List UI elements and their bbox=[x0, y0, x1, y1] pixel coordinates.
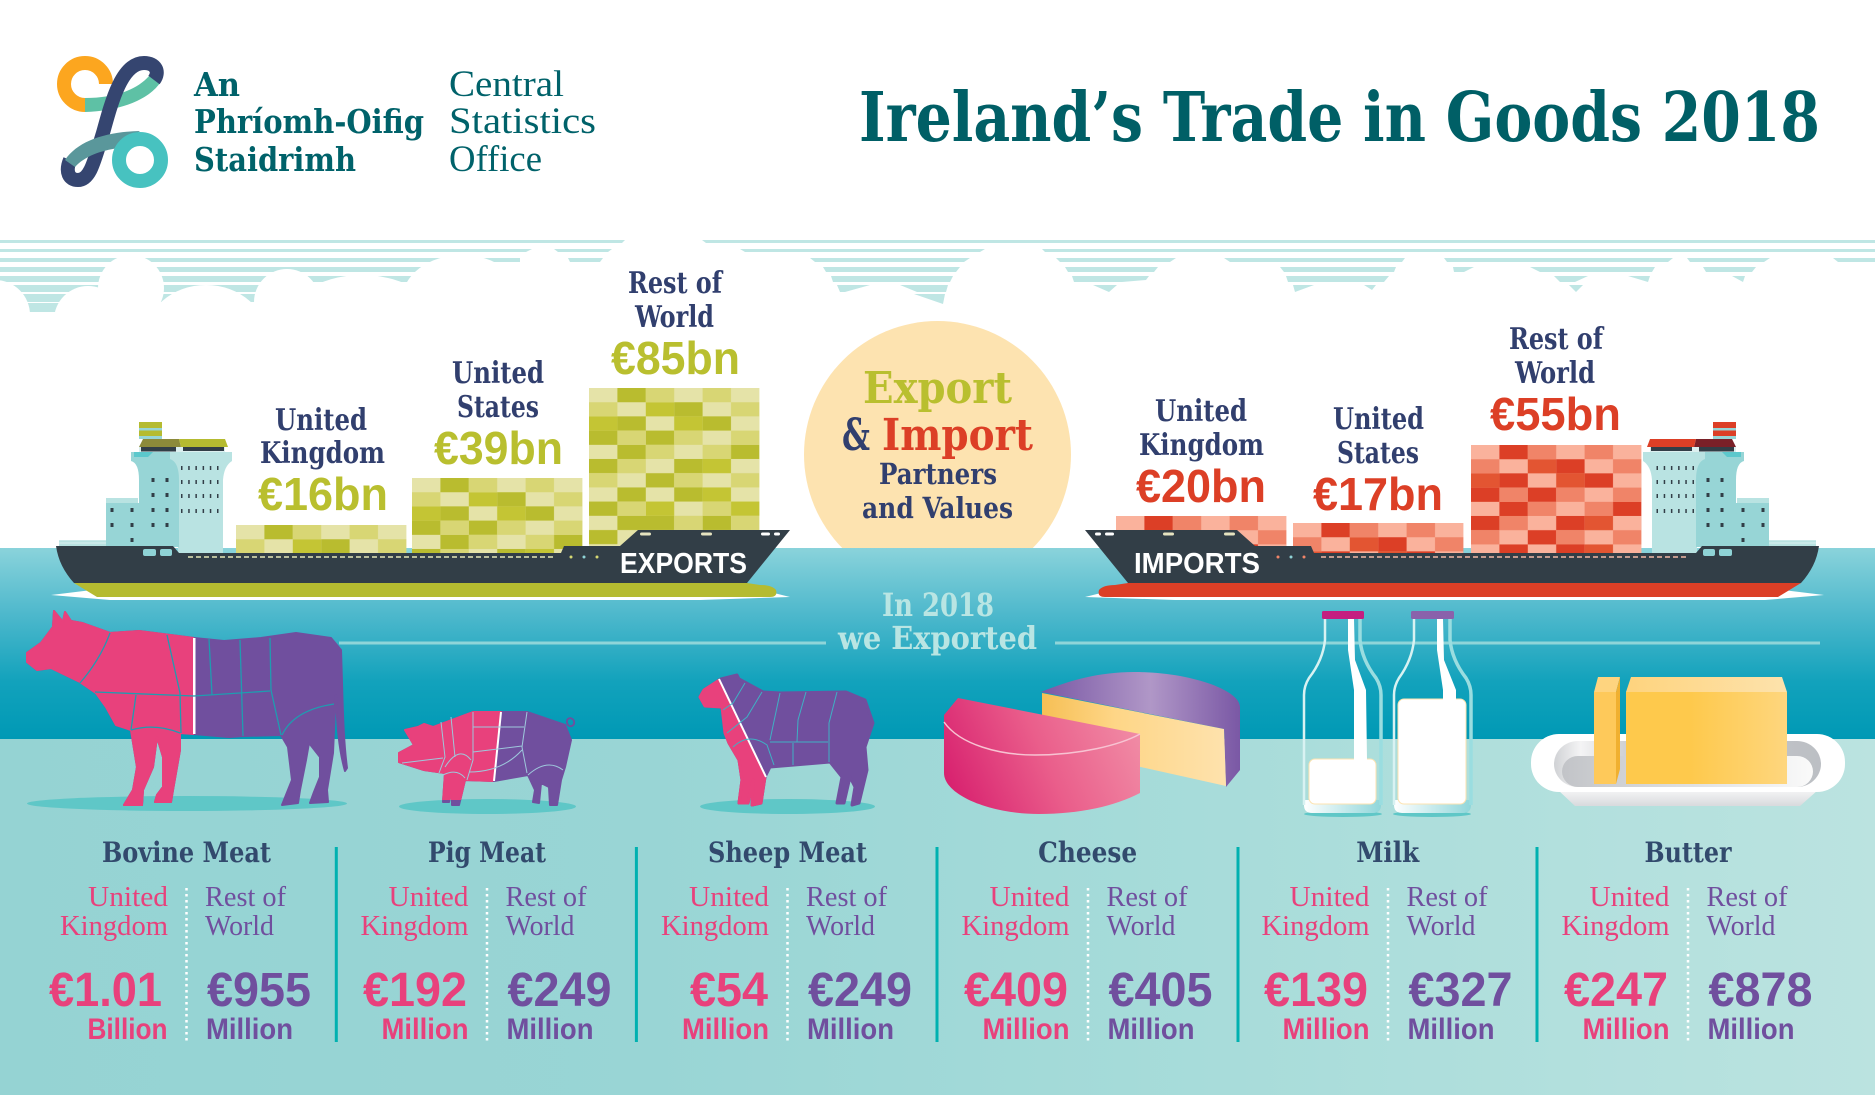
panel: Butter: Butter bbox=[1644, 836, 1732, 869]
export label: United Kingdom €16bn: €16bn bbox=[258, 468, 388, 520]
panel: Bovine Meat: Kingdom bbox=[60, 910, 168, 942]
icon: butter on dish bbox=[1531, 677, 1845, 806]
panel: Cheese: Kingdom bbox=[962, 910, 1070, 942]
export hull bottom bbox=[74, 583, 776, 597]
EXPORTS label: EXPORTS bbox=[620, 548, 747, 580]
heading: Export & Import Partners and Values: & bbox=[842, 410, 870, 461]
panel: Sheep Meat: Kingdom bbox=[661, 910, 769, 942]
panel: Pig Meat: Kingdom bbox=[360, 910, 469, 942]
export label: Rest of World €85bn: €85bn bbox=[611, 332, 740, 384]
panel: Butter: Million bbox=[1582, 1013, 1670, 1046]
heading: Export & Import Partners and Values: Import bbox=[882, 410, 1034, 461]
panel: Butter: World bbox=[1706, 910, 1776, 942]
import containers: United States bbox=[1293, 523, 1463, 555]
sky stripes and clouds bbox=[0, 240, 1875, 395]
export label: United Kingdom €16bn bbox=[258, 403, 388, 520]
heading: Export & Import Partners and Values: Partners bbox=[879, 457, 997, 491]
panel: Milk bbox=[1262, 836, 1512, 1046]
panel: Sheep Meat: World bbox=[806, 910, 875, 942]
section rule left bbox=[339, 642, 826, 644]
panel: Butter: €878 bbox=[1708, 964, 1812, 1017]
panel: Pig Meat: €192 bbox=[363, 964, 467, 1017]
panel: Bovine Meat: Million bbox=[206, 1013, 293, 1046]
import funnel bbox=[1647, 422, 1736, 447]
import label: United Kingdom €20bn: Kingdom bbox=[1139, 428, 1264, 463]
import ship bbox=[1085, 422, 1824, 600]
import label: Rest of World €55bn: World bbox=[1514, 356, 1595, 391]
heading: In 2018 we Exported: we Exported bbox=[837, 619, 1037, 657]
panel: Pig Meat: Million bbox=[382, 1013, 468, 1046]
panel: Sheep Meat: Million bbox=[807, 1013, 894, 1046]
panel: Sheep Meat: Rest of bbox=[806, 881, 887, 913]
panel: Sheep Meat: €54 bbox=[690, 964, 768, 1017]
export label: United Kingdom €16bn: Kingdom bbox=[260, 436, 385, 471]
IMPORTS label: IMPORTS bbox=[1134, 548, 1260, 580]
panel: Bovine Meat: Billion bbox=[88, 1013, 168, 1046]
panel: Cheese: Rest of bbox=[1106, 881, 1188, 913]
export foam bbox=[51, 590, 790, 600]
import label: United States €17bn: States bbox=[1337, 436, 1419, 471]
heading: In 2018 we Exported bbox=[837, 586, 1037, 657]
bottle one bbox=[1304, 611, 1382, 817]
panel: Butter bbox=[1562, 836, 1812, 1046]
section rule right bbox=[1055, 642, 1820, 644]
panel: Pig Meat: Million bbox=[506, 1013, 594, 1046]
sun circle bbox=[804, 321, 1071, 588]
bottle two bbox=[1393, 611, 1471, 817]
import containers: United Kingdom bbox=[1116, 516, 1286, 552]
panel: Bovine Meat bbox=[49, 836, 311, 1046]
export label: United States €39bn: States bbox=[457, 390, 539, 425]
import label: Rest of World €55bn: €55bn bbox=[1490, 388, 1621, 440]
logo text: Irish name bbox=[193, 65, 424, 179]
heading: In 2018 we Exported: In 2018 bbox=[882, 586, 994, 624]
panel: Cheese bbox=[962, 836, 1212, 1046]
panel: Pig Meat: €249 bbox=[508, 964, 612, 1017]
import hull bottom bbox=[1099, 583, 1801, 597]
import containers: Rest of World bbox=[1471, 445, 1641, 553]
panel: Sheep Meat: Sheep Meat bbox=[708, 836, 867, 869]
panel: Butter: €247 bbox=[1564, 964, 1668, 1017]
logo text: English name: Central bbox=[449, 64, 564, 105]
heading: Export & Import Partners and Values bbox=[842, 363, 1034, 525]
export label: Rest of World €85bn: World bbox=[634, 300, 714, 335]
panel: Cheese: €405 bbox=[1108, 964, 1212, 1017]
panel: Cheese: Million bbox=[1108, 1013, 1194, 1046]
export containers: United Kingdom bbox=[236, 525, 406, 555]
heading: Export & Import Partners and Values: and Values bbox=[862, 491, 1013, 525]
icon: cow bbox=[27, 611, 347, 811]
panel: Milk: United bbox=[1290, 881, 1370, 913]
panel: Milk: Rest of bbox=[1406, 881, 1488, 913]
logo: Central Statistics Office symbol bbox=[64, 63, 161, 181]
panel: Milk: Million bbox=[1282, 1013, 1370, 1046]
panel: Bovine Meat: €955 bbox=[207, 964, 311, 1017]
panel: Sheep Meat bbox=[661, 836, 912, 1046]
icon: cheese bbox=[944, 672, 1240, 814]
import label: United States €17bn: €17bn bbox=[1313, 468, 1443, 520]
logo text: Irish name: Phríomh-Oifig bbox=[194, 102, 424, 141]
export label: United States €39bn: United bbox=[452, 356, 544, 391]
export containers: United States bbox=[412, 478, 582, 555]
export label: United States €39bn bbox=[434, 356, 563, 474]
panel: Sheep Meat: Million bbox=[682, 1013, 769, 1046]
import foam bbox=[1085, 590, 1824, 600]
panel: Pig Meat bbox=[360, 836, 612, 1046]
panel: Milk: Million bbox=[1408, 1013, 1494, 1046]
import label: United Kingdom €20bn: €20bn bbox=[1136, 460, 1266, 512]
panel: Milk: Milk bbox=[1356, 836, 1420, 869]
panel: Sheep Meat: €249 bbox=[808, 964, 912, 1017]
export label: United Kingdom €16bn: United bbox=[275, 403, 367, 438]
logo text: English name: Statistics bbox=[449, 101, 596, 142]
panel: Bovine Meat: World bbox=[205, 910, 274, 942]
panel: Pig Meat: Rest of bbox=[506, 881, 587, 913]
icon: milk bottles bbox=[1304, 611, 1471, 817]
export ship bbox=[51, 388, 790, 600]
panel: Cheese: €409 bbox=[964, 964, 1068, 1017]
panel: Cheese: Million bbox=[982, 1013, 1070, 1046]
panel: Cheese: Cheese bbox=[1038, 836, 1137, 869]
export containers: Rest of World bbox=[589, 388, 759, 548]
panel: Milk: World bbox=[1406, 910, 1476, 942]
import label: Rest of World €55bn bbox=[1490, 322, 1621, 440]
floor band bbox=[0, 739, 1875, 1095]
logo text: Irish name: An bbox=[193, 65, 240, 104]
sea band bbox=[0, 548, 1875, 739]
panel: Pig Meat: United bbox=[388, 881, 469, 913]
panel: Pig Meat: Pig Meat bbox=[428, 836, 546, 869]
panel: Cheese: World bbox=[1106, 910, 1176, 942]
panel: Butter: Million bbox=[1708, 1013, 1794, 1046]
panel: Milk: €327 bbox=[1408, 964, 1512, 1017]
panel: Bovine Meat: €1.01 bbox=[49, 964, 162, 1017]
export label: Rest of World €85bn: Rest of bbox=[628, 266, 724, 301]
icon: pig bbox=[399, 712, 576, 814]
panel: Bovine Meat: United bbox=[88, 881, 168, 913]
panel: Butter: Rest of bbox=[1706, 881, 1788, 913]
panel: Milk: €139 bbox=[1264, 964, 1368, 1017]
logo text: English name: Office bbox=[449, 139, 542, 180]
divider lines between columns bbox=[336, 847, 1537, 1042]
panel: Bovine Meat: Rest of bbox=[205, 881, 286, 913]
import label: United States €17bn: United bbox=[1333, 402, 1424, 437]
import label: United Kingdom €20bn bbox=[1136, 394, 1266, 512]
export label: United States €39bn: €39bn bbox=[434, 422, 563, 474]
panel: Milk: Kingdom bbox=[1262, 910, 1370, 942]
panel: Sheep Meat: United bbox=[689, 881, 769, 913]
export label: Rest of World €85bn bbox=[611, 266, 740, 384]
panel: Bovine Meat: Bovine Meat bbox=[102, 836, 271, 869]
import label: United States €17bn bbox=[1313, 402, 1443, 520]
import label: Rest of World €55bn: Rest of bbox=[1509, 322, 1605, 357]
heading: Export & Import Partners and Values: Export bbox=[863, 363, 1013, 414]
logo text: English name bbox=[449, 64, 596, 180]
panel: Pig Meat: World bbox=[506, 910, 575, 942]
import label: United Kingdom €20bn: United bbox=[1155, 394, 1247, 429]
panel: Butter: Kingdom bbox=[1562, 910, 1670, 942]
panel: Cheese: United bbox=[990, 881, 1070, 913]
export funnel bbox=[139, 422, 228, 447]
panel: Butter: United bbox=[1590, 881, 1670, 913]
title: Ireland’s Trade in Goods 2018 bbox=[859, 78, 1820, 158]
icon: sheep bbox=[700, 675, 875, 814]
logo text: Irish name: Staidrimh bbox=[194, 140, 356, 179]
